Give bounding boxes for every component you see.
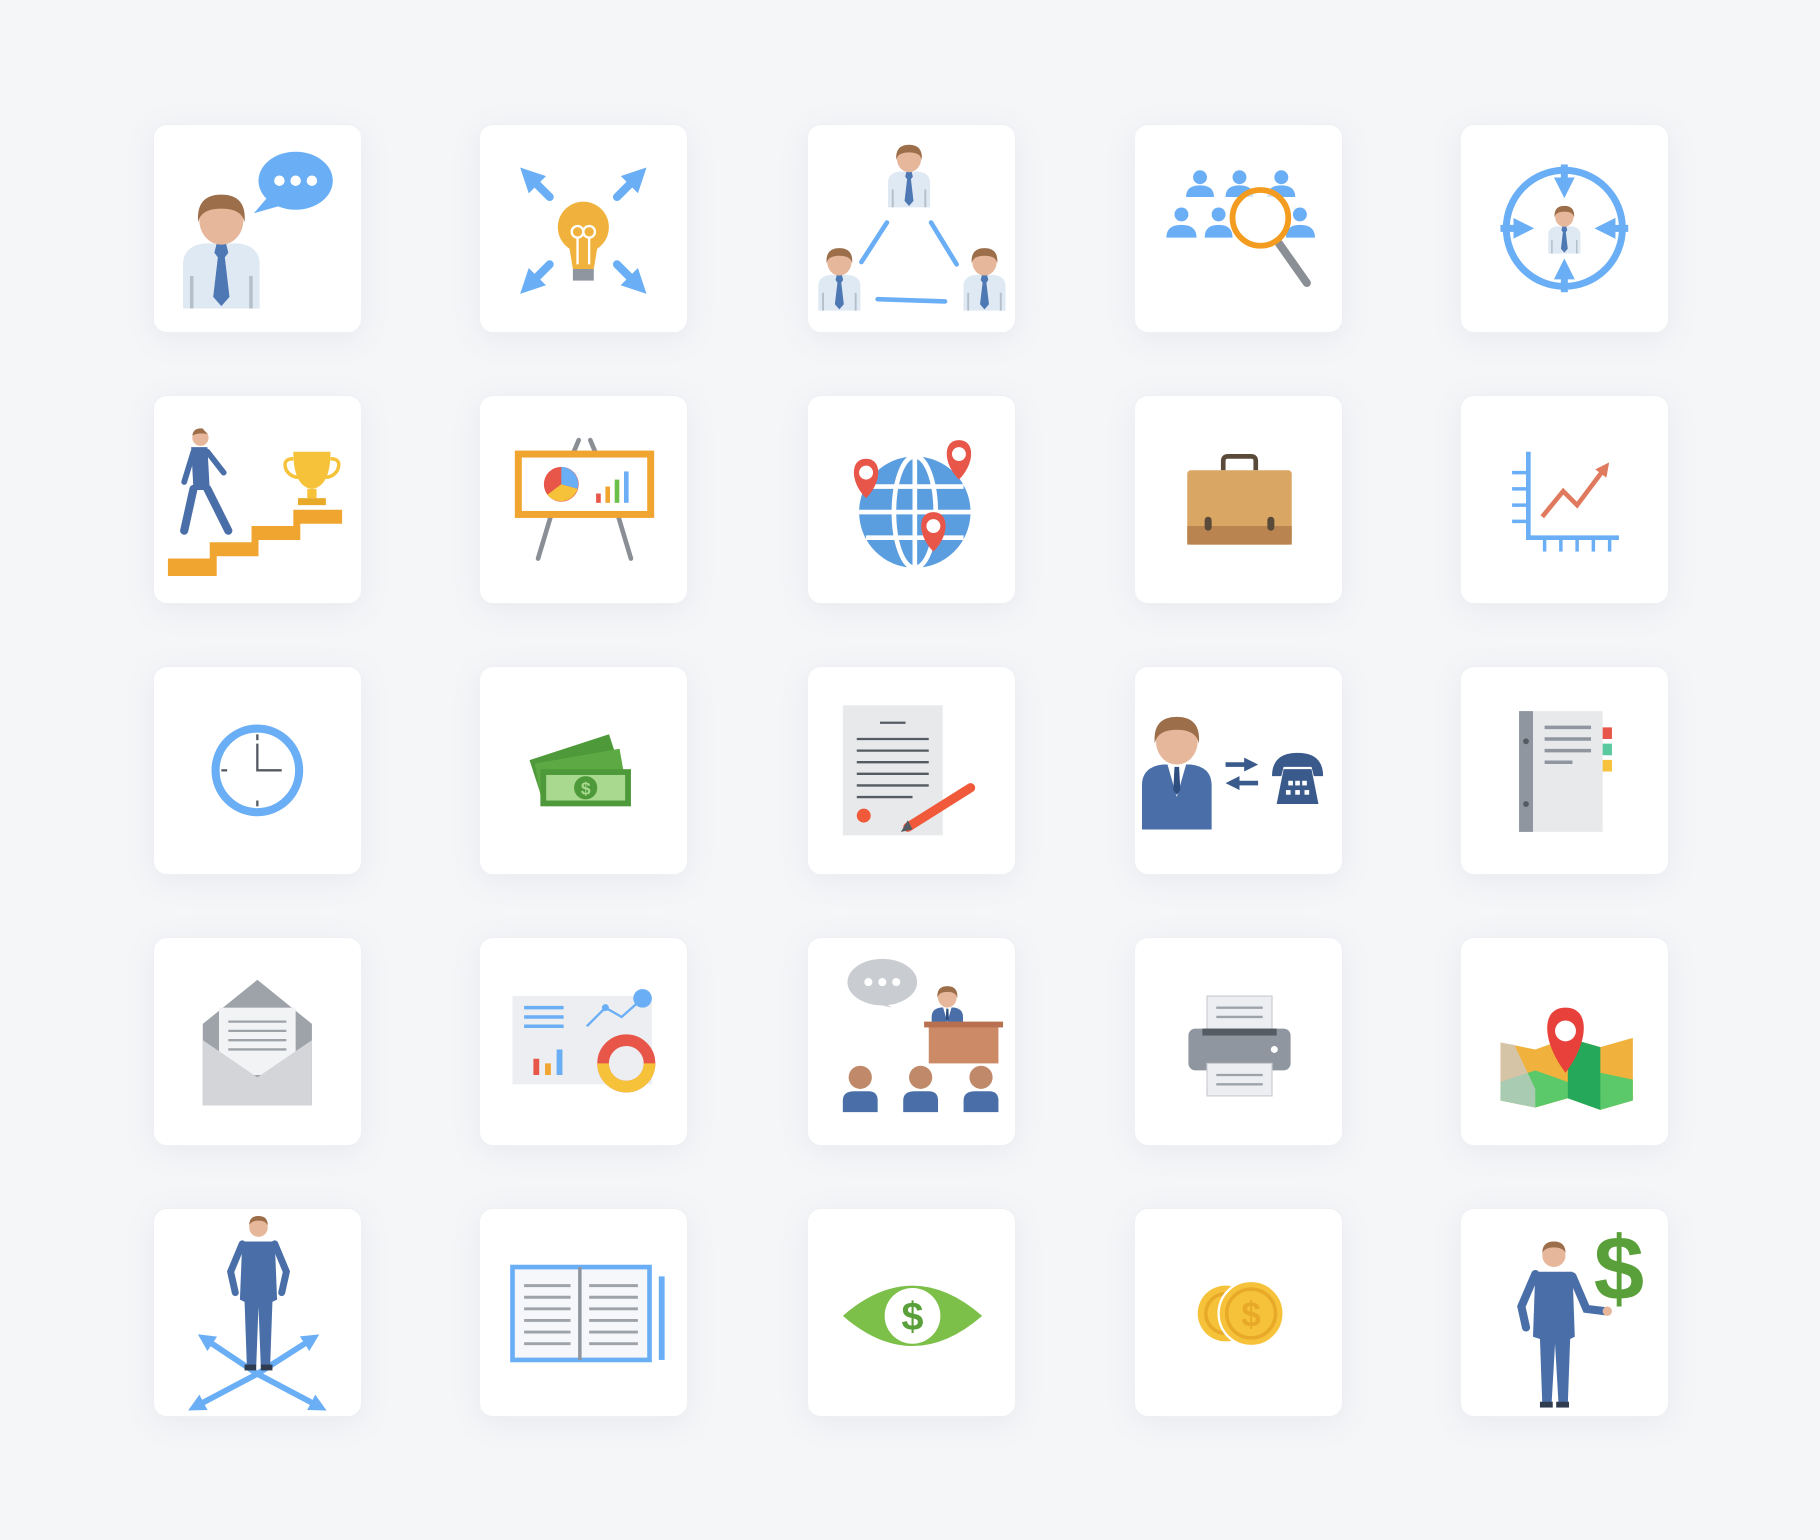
card: target man (1460, 124, 1669, 333)
card: envelope (153, 937, 362, 1146)
card: analytics dashboard (479, 937, 688, 1146)
card: man speaking (153, 124, 362, 333)
card: notebook (1460, 666, 1669, 875)
card: businessman dollar (1460, 1208, 1669, 1417)
card: briefcase (1134, 395, 1343, 604)
card: cash (479, 666, 688, 875)
card: printer (1134, 937, 1343, 1146)
card: money eye (807, 1208, 1016, 1417)
card: coins (1134, 1208, 1343, 1417)
card: man crossroads (153, 1208, 362, 1417)
card: contract signing (807, 666, 1016, 875)
card: people search (1134, 124, 1343, 333)
card: businessman dollar: $ (1594, 1219, 1644, 1320)
card: growth chart (1460, 395, 1669, 604)
card: coins: $ (1241, 1295, 1261, 1334)
card: map pin (1460, 937, 1669, 1146)
card: stairs to trophy (153, 395, 362, 604)
card: open book (479, 1208, 688, 1417)
card: presentation easel (479, 395, 688, 604)
card: money eye: $ (902, 1295, 924, 1339)
card: clock (153, 666, 362, 875)
card: idea bulb arrows (479, 124, 688, 333)
card: globe with pins (807, 395, 1016, 604)
card: speaker audience (807, 937, 1016, 1146)
card: team triangle (807, 124, 1016, 333)
card: man and phone (1134, 666, 1343, 875)
card: cash: $ (581, 779, 591, 799)
